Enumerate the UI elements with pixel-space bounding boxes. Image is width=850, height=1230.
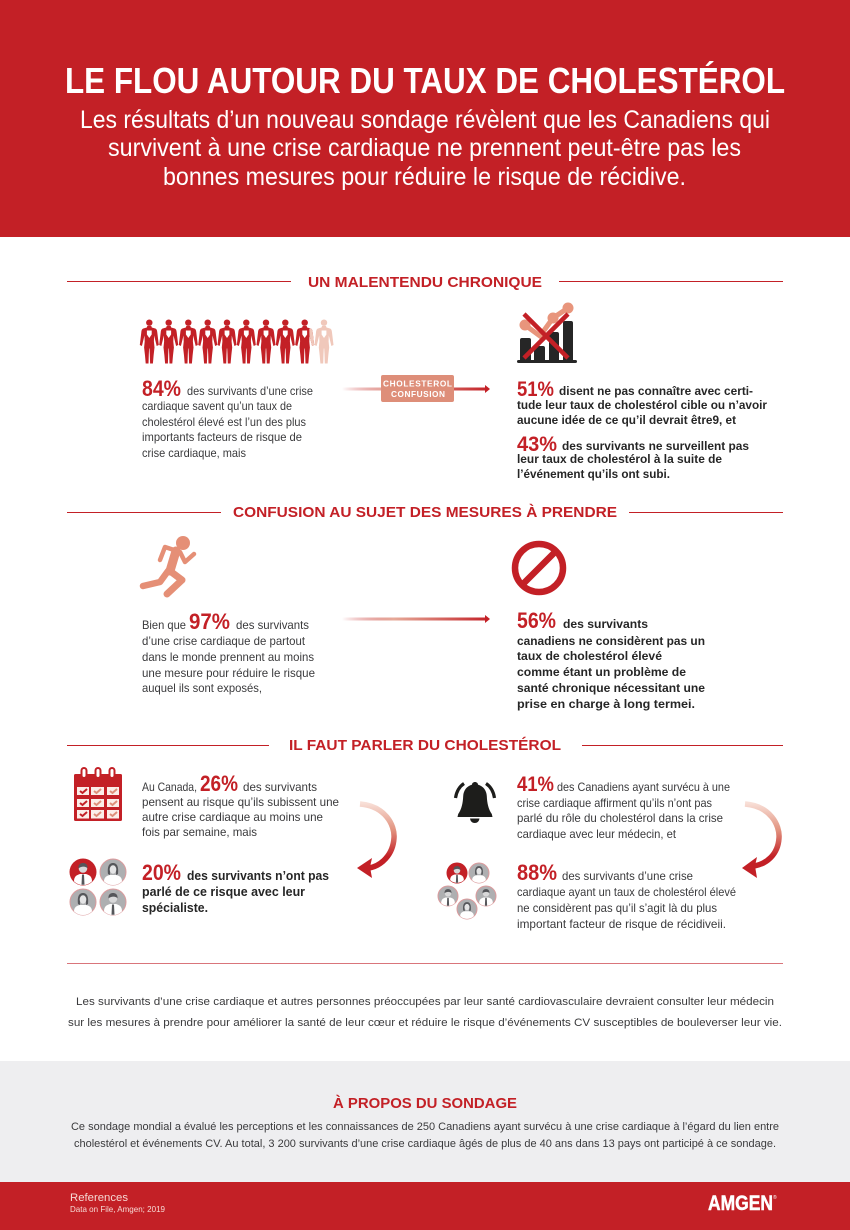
icon: four avatars [70, 858, 126, 915]
text block: 51% and 43%: aucune idée de ce qu’il devrait être9, et [517, 413, 736, 427]
icon: runner [143, 536, 194, 594]
text block: 51% and 43%: des survivants ne surveillent pas [562, 439, 749, 453]
panel: about the survey [0, 1061, 850, 1182]
arrow [342, 615, 490, 623]
text block: 56%: taux de cholestérol élevé [517, 649, 662, 663]
text block: 56%: des survivants [563, 617, 648, 631]
badge [381, 375, 454, 402]
survey text [71, 1121, 779, 1150]
text block: 97% [142, 609, 315, 695]
subtitle [80, 106, 770, 191]
closing paragraph: sur les mesures à prendre pour améliorer la santé de leur cœur et réduire le risque d’événements CV susceptibles de bouleverser leur vie. [68, 1017, 782, 1029]
curved arrow left [357, 804, 394, 878]
references: References [70, 1192, 129, 1204]
text block: 97%: auquel ils sont exposés, [142, 681, 262, 695]
text block: 84%: 84% [142, 376, 181, 401]
text block: 97%: dans le monde prennent au moins [142, 650, 314, 664]
text block: 97%: 97% [189, 609, 230, 634]
logo: Amgen: ® [773, 1194, 777, 1201]
text block: 41%: 41% [517, 772, 554, 796]
survey text: cholestérol et événements CV. Au total, 3 200 survivants d’une crise cardiaque âgés de plus de 40 ans dans 13 pays ont participé à ce sondage. [74, 1138, 776, 1150]
text block: 26% [142, 771, 339, 839]
header banner [0, 0, 850, 237]
curved arrow right [742, 804, 779, 878]
text block: 41%: parlé du rôle du cholestérol dans la crise [517, 811, 723, 825]
text block: 56%: canadiens ne considèrent pas un [517, 634, 705, 648]
references [70, 1192, 165, 1214]
references: Data on File, Amgen; 2019 [70, 1204, 165, 1214]
text block: 56%: santé chronique nécessitant une [517, 681, 705, 695]
icon: prohibition sign [515, 544, 563, 592]
text block: 41% [517, 772, 730, 841]
logo: Amgen: AMGEN [708, 1192, 773, 1215]
text block: 88%: cardiaque ayant un taux de cholestérol élevé [517, 885, 736, 899]
text block: 88%: des survivants d’une crise [562, 869, 693, 883]
text block: 97%: d’une crise cardiaque de partout [142, 634, 306, 648]
text block: 51% and 43%: 43% [517, 432, 557, 456]
closing paragraph: Les survivants d’une crise cardiaque et autres personnes préoccupées par leur santé cardiovasculaire devraient consulter leur médecin [76, 996, 774, 1008]
arrow with cholesterol confusion badge [342, 375, 490, 402]
subtitle: survivent à une crise cardiaque ne prennent peut-être pas les [108, 134, 741, 162]
text block: 88%: 88% [517, 860, 557, 885]
text block: 84%: cardiaque savent qu’un taux de [142, 399, 292, 413]
text block: 26%: 26% [200, 771, 238, 796]
text block: 20%: des survivants n’ont pas [187, 869, 329, 883]
footer [0, 1182, 850, 1230]
text block: 20%: 20% [142, 860, 181, 885]
text block: 41%: crise cardiaque affirment qu’ils n’ont pas [517, 796, 712, 810]
text block: 88% [517, 860, 736, 931]
text block: 26%: fois par semaine, mais [142, 825, 257, 839]
text block: 88%: important facteur de risque de récidiveii. [517, 917, 726, 931]
badge: CONFUSION [391, 389, 445, 399]
text block: 26%: pensent au risque qu’ils subissent une [142, 795, 339, 809]
text block: 84%: cholestérol élevé est l’un des plus [142, 415, 306, 429]
text block: 51% and 43%: tude leur taux de cholestérol cible ou n’avoir [517, 398, 767, 412]
text block: 56%: prise en charge à long termei. [517, 697, 695, 711]
text block: 26%: autre crise cardiaque au moins une [142, 810, 323, 824]
text block: 26%: des survivants [243, 780, 317, 794]
text block: 51% and 43% [517, 377, 767, 481]
text block: 97%: une mesure pour réduire le risque [142, 666, 315, 680]
subtitle: Les résultats d’un nouveau sondage révèlent que les Canadiens qui [80, 106, 770, 134]
survey heading: À PROPOS DU SONDAGE [333, 1095, 517, 1112]
heading: confusion au sujet des mesures: CONFUSION AU SUJET DES MESURES À PRENDRE [233, 504, 617, 521]
survey text: Ce sondage mondial a évalué les perceptions et les connaissances de 250 Canadiens ayant survécu à une crise cardiaque à l’égard du lien entre [71, 1121, 779, 1133]
text block: 84% [142, 376, 313, 460]
text block: 97%: des survivants [236, 618, 309, 632]
icon: calendar [74, 768, 122, 821]
text block: 20%: parlé de ce risque avec leur [142, 885, 305, 899]
text block: 51% and 43%: leur taux de cholestérol à la suite de [517, 452, 722, 466]
text block: 84%: des survivants d’une crise [187, 384, 313, 398]
text block: 51% and 43%: 51% [517, 377, 554, 401]
heading: il faut parler du cholestérol: IL FAUT PARLER DU CHOLESTÉROL [289, 737, 561, 754]
text block: 41%: des Canadiens ayant survécu à une [557, 780, 730, 794]
heading: un malentendu chronique: UN MALENTENDU CHRONIQUE [308, 274, 542, 291]
text block: 26%: Au Canada, [142, 780, 197, 794]
text block: 56%: comme étant un problème de [517, 665, 686, 679]
closing paragraph [68, 996, 782, 1029]
text block: 88%: ne considèrent pas qu’il s’agit là du plus [517, 901, 717, 915]
badge: CHOLESTEROL [383, 378, 452, 388]
text block: 84%: importants facteurs de risque de [142, 430, 302, 444]
text block: 84%: crise cardiaque, mais [142, 446, 246, 460]
subtitle: bonnes mesures pour réduire le risque de récidive. [163, 163, 686, 191]
text block: 41%: cardiaque avec leur médecin, et [517, 827, 677, 841]
icon: crossed-out bar chart [517, 302, 577, 363]
icon: ten human figures, 84% filled [140, 320, 334, 364]
text block: 97%: Bien que [142, 618, 186, 632]
text block: 51% and 43%: disent ne pas connaître avec certi- [559, 384, 753, 398]
icon: bell [456, 782, 494, 823]
text block: 51% and 43%: l’événement qu’ils ont subi. [517, 467, 670, 481]
text block: 56%: 56% [517, 608, 556, 633]
text block: 20%: spécialiste. [142, 901, 208, 915]
text block: 56% [517, 608, 705, 711]
text block: 20% [142, 860, 329, 915]
icon: five avatars [438, 862, 496, 919]
